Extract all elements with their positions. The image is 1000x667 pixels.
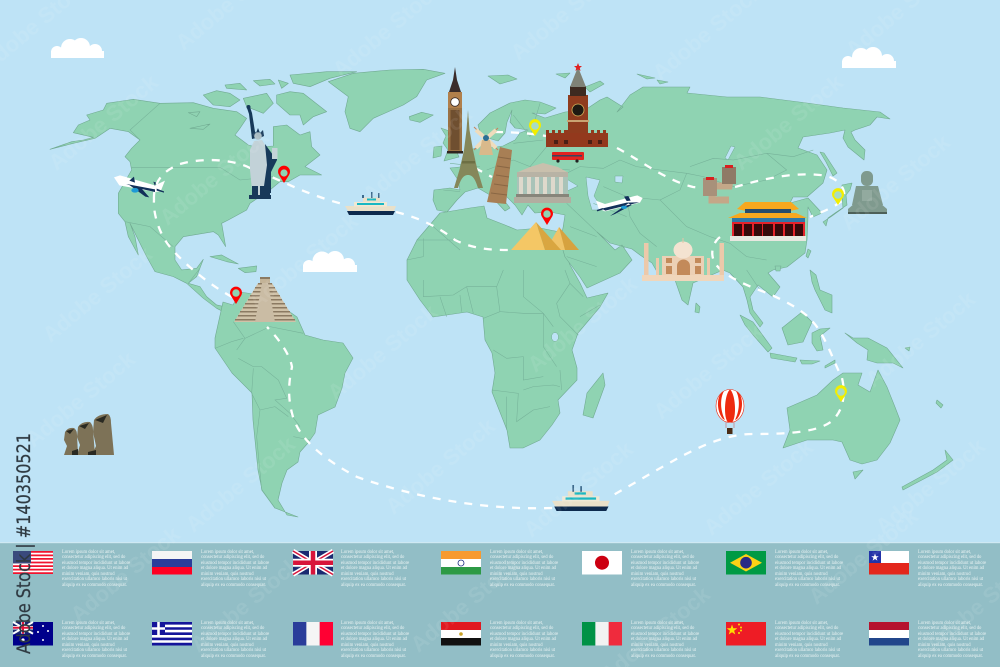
- text block: Chile: exercitation ullamco laboris nisi ut: [918, 577, 983, 582]
- stock watermarks: Adobe Stock: [38, 241, 157, 347]
- text block: Russia: Lorem ipsum dolor sit amet,: [201, 550, 254, 554]
- text block: Egypt: eiusmod tempor incididunt ut labore: [490, 632, 558, 637]
- text block: USA: et dolore magna aliqua. Ut enim ad: [62, 566, 128, 571]
- flag: Brazil: [726, 551, 766, 574]
- text block: Chile: minim veniam, quis nostrud: [918, 572, 971, 577]
- airplane over central asia: [596, 195, 643, 216]
- ship southern ocean: [552, 485, 610, 511]
- text block: Japan: [631, 550, 699, 588]
- landmark: parthenon: [514, 163, 571, 203]
- text block: China: minim veniam, quis nostrud: [775, 643, 828, 648]
- flag: Russia: [152, 551, 192, 574]
- flag: UK: [293, 551, 333, 574]
- landmark: eiffel tower: [454, 110, 483, 188]
- stock watermarks: Adobe Stock: [44, 69, 163, 175]
- text block: Netherlands: exercitation ullamco laboris nisi ut: [918, 648, 983, 653]
- landmark: taj mahal: [642, 238, 724, 281]
- text block: Italy: [631, 620, 699, 659]
- text block: Egypt: minim veniam, quis nostrud: [490, 643, 543, 648]
- text block: Brazil: exercitation ullamco laboris nisi ut: [775, 577, 840, 582]
- text block: Italy: exercitation ullamco laboris nisi ut: [631, 648, 696, 653]
- airplane over north america: [114, 175, 165, 197]
- text block: France: aliquip ex ea commodo consequat.: [341, 654, 406, 659]
- stock watermarks: Adobe Stock: [181, 431, 300, 537]
- text block: Netherlands: consectetur adipiscing elit, sed do: [918, 626, 981, 631]
- text block: USA: Lorem ipsum dolor sit amet,: [62, 550, 115, 554]
- text block: France: Lorem ipsum dolor sit amet,: [341, 620, 394, 626]
- text block: India: Lorem ipsum dolor sit amet,: [490, 550, 543, 554]
- text block: USA: [62, 550, 130, 588]
- stock watermarks: Adobe Stock: [186, 551, 305, 657]
- text block: Greece: Lorem ipsum dolor sit amet,: [201, 620, 254, 626]
- text block: China: eiusmod tempor incididunt ut labore: [775, 632, 843, 637]
- text block: UK: exercitation ullamco laboris nisi ut: [341, 577, 406, 582]
- text block: Greece: minim veniam, quis nostrud: [201, 643, 254, 648]
- text block: Chile: Lorem ipsum dolor sit amet,: [918, 550, 971, 554]
- pin: new york: [278, 166, 290, 183]
- text block: USA: aliquip ex ea commodo consequat.: [62, 583, 127, 588]
- stock watermarks: Adobe Stock: [649, 318, 768, 424]
- stock watermarks: Adobe Stock: [406, 551, 525, 657]
- flag: USA: [13, 551, 53, 574]
- stock watermarks: Adobe Stock: [244, 208, 363, 314]
- text block: USA: exercitation ullamco laboris nisi ut: [62, 577, 127, 582]
- landmark: mayan pyramid: [234, 277, 296, 322]
- africa: [407, 206, 608, 448]
- text block: Japan: Lorem ipsum dolor sit amet,: [631, 550, 684, 554]
- text block: UK: Lorem ipsum dolor sit amet,: [341, 550, 394, 554]
- text block: Russia: aliquip ex ea commodo consequat.: [201, 583, 266, 588]
- stock watermarks: Adobe Stock: [358, 101, 477, 207]
- text block: China: aliquip ex ea commodo consequat.: [775, 654, 840, 659]
- landmark: kremlin spasskaya tower: [546, 63, 608, 147]
- text block: Russia: [201, 550, 269, 588]
- text block: USA: eiusmod tempor incididunt ut labore: [62, 561, 130, 566]
- text block: Italy: Lorem ipsum dolor sit amet,: [631, 620, 684, 626]
- stock watermarks: Adobe Stock: [871, 433, 990, 539]
- text block: Australia: [62, 620, 130, 659]
- text block: France: exercitation ullamco laboris nisi ut: [341, 648, 406, 653]
- text block: China: exercitation ullamco laboris nisi ut: [775, 648, 840, 653]
- text block: Netherlands: [918, 620, 986, 659]
- landmark: great buddha: [848, 171, 887, 214]
- text block: Netherlands: minim veniam, quis nostrud: [918, 643, 971, 648]
- text block: Australia: exercitation ullamco laboris nisi ut: [62, 648, 127, 653]
- flag: China: [726, 622, 766, 646]
- text block: Japan: consectetur adipiscing elit, sed do: [631, 555, 694, 560]
- stock watermarks: Adobe Stock: [66, 521, 185, 627]
- text block: India: eiusmod tempor incididunt ut labore: [490, 561, 558, 566]
- text block: Russia: exercitation ullamco laboris nisi ut: [201, 577, 266, 582]
- ship atlantic: [345, 192, 396, 215]
- landmark: pyramids of giza: [511, 222, 579, 250]
- greenland and arctic islands: [188, 69, 445, 273]
- text block: Italy: minim veniam, quis nostrud: [631, 643, 684, 648]
- flag: France: [293, 622, 333, 646]
- flag: Italy: [582, 622, 622, 646]
- text block: Japan: exercitation ullamco laboris nisi ut: [631, 577, 696, 582]
- text block: Russia: eiusmod tempor incididunt ut labore: [201, 561, 269, 566]
- text block: Japan: minim veniam, quis nostrud: [631, 572, 684, 577]
- stock watermarks: Adobe Stock: [804, 503, 923, 609]
- text block: India: exercitation ullamco laboris nisi ut: [490, 577, 555, 582]
- text block: UK: minim veniam, quis nostrud: [341, 572, 394, 577]
- landmark: big ben: [447, 67, 463, 154]
- text block: Brazil: et dolore magna aliqua. Ut enim ad: [775, 566, 841, 571]
- bottom info band: [0, 542, 1000, 667]
- text block: Egypt: aliquip ex ea commodo consequat.: [490, 654, 555, 659]
- text block: Netherlands: et dolore magna aliqua. Ut enim ad: [918, 637, 984, 642]
- text block: Greece: exercitation ullamco laboris nisi ut: [201, 648, 266, 653]
- cloud atlantic: [303, 251, 357, 272]
- text block: Australia: eiusmod tempor incididunt ut labore: [62, 632, 130, 637]
- text block: India: consectetur adipiscing elit, sed do: [490, 555, 553, 560]
- text block: Russia: minim veniam, quis nostrud: [201, 572, 254, 577]
- text block: Italy: eiusmod tempor incididunt ut labore: [631, 632, 699, 637]
- text block: Netherlands: eiusmod tempor incididunt ut labore: [918, 632, 986, 637]
- text block: Egypt: [490, 620, 558, 659]
- flag: Greece: [152, 622, 192, 646]
- vertical stock id watermark: Adobe Stock | #140350521: [13, 433, 35, 654]
- text block: UK: [341, 550, 409, 588]
- text block: India: minim veniam, quis nostrud: [490, 572, 543, 577]
- south america: [215, 292, 353, 517]
- madagascar: [583, 373, 605, 418]
- stock watermarks: Adobe Stock: [381, 413, 500, 519]
- text block: Greece: aliquip ex ea commodo consequat.: [201, 654, 266, 659]
- british isles: [433, 128, 459, 161]
- text block: UK: et dolore magna aliqua. Ut enim ad: [341, 566, 407, 571]
- text block: China: et dolore magna aliqua. Ut enim ad: [775, 637, 841, 642]
- oceania islands: [853, 400, 953, 490]
- text block: Australia: minim veniam, quis nostrud: [62, 643, 115, 648]
- text block: UK: eiusmod tempor incididunt ut labore: [341, 561, 409, 566]
- text block: Russia: et dolore magna aliqua. Ut enim ad: [201, 566, 267, 571]
- cloud top right: [842, 47, 896, 68]
- stock watermarks: Adobe Stock: [519, 436, 638, 542]
- stock watermarks: Adobe Stock: [699, 434, 818, 540]
- pin: egypt: [541, 208, 553, 225]
- text block: China: consectetur adipiscing elit, sed do: [775, 626, 838, 631]
- text block: Chile: et dolore magna aliqua. Ut enim ad: [918, 566, 984, 571]
- flag: Japan: [582, 551, 622, 574]
- text block: Italy: consectetur adipiscing elit, sed do: [631, 626, 694, 631]
- flag: India: [441, 551, 481, 574]
- text block: USA: minim veniam, quis nostrud: [62, 572, 115, 577]
- pin: colombia: [230, 287, 242, 304]
- text block: France: eiusmod tempor incididunt ut labore: [341, 632, 409, 637]
- stock watermarks: Adobe Stock: [836, 129, 955, 235]
- landmark: moai statues: [64, 414, 114, 455]
- text block: Netherlands: aliquip ex ea commodo consequat.: [918, 654, 983, 659]
- text block: Greece: [201, 620, 269, 659]
- asian islands: [695, 152, 910, 368]
- text block: Russia: consectetur adipiscing elit, sed do: [201, 555, 264, 560]
- country borders: [125, 103, 813, 508]
- text block: France: et dolore magna aliqua. Ut enim ad: [341, 637, 407, 642]
- text block: Brazil: [775, 550, 843, 588]
- text block: France: consectetur adipiscing elit, sed do: [341, 626, 404, 631]
- text block: Egypt: et dolore magna aliqua. Ut enim ad: [490, 637, 556, 642]
- inland seas: [538, 146, 735, 342]
- landmark: great wall: [703, 165, 736, 200]
- north atlantic and arctic russian islands: [488, 73, 668, 92]
- text block: Italy: et dolore magna aliqua. Ut enim ad: [631, 637, 697, 642]
- australia: [783, 370, 900, 464]
- text block: France: [341, 620, 409, 659]
- text block: Chile: consectetur adipiscing elit, sed do: [918, 555, 981, 560]
- flag: Australia: [13, 622, 53, 646]
- text block: UK: consectetur adipiscing elit, sed do: [341, 555, 404, 560]
- stock watermarks: Adobe Stock: [21, 346, 140, 452]
- text block: UK: aliquip ex ea commodo consequat.: [341, 583, 406, 588]
- landmark: statue of liberty: [246, 105, 278, 199]
- flag: Netherlands: [869, 622, 909, 646]
- stock watermarks: Adobe Stock: [729, 69, 848, 175]
- cloud top left: [51, 38, 104, 58]
- pin: moscow: [529, 119, 541, 136]
- landmark: windmill: [474, 127, 498, 155]
- landmark: leaning tower of pisa: [487, 147, 512, 204]
- pin: japan: [832, 188, 844, 205]
- text block: China: [775, 620, 843, 659]
- text block: Egypt: Lorem ipsum dolor sit amet,: [490, 620, 543, 626]
- text block: Brazil: minim veniam, quis nostrud: [775, 572, 828, 577]
- text block: Greece: eiusmod tempor incididunt ut labore: [201, 632, 269, 637]
- text block: Brazil: aliquip ex ea commodo consequat.: [775, 583, 840, 588]
- text block: Brazil: Lorem ipsum dolor sit amet,: [775, 550, 828, 554]
- flag: Chile: [869, 551, 909, 574]
- stock watermarks: Adobe Stock: [861, 286, 980, 392]
- world map: [50, 69, 953, 517]
- text block: Chile: eiusmod tempor incididunt ut labore: [918, 561, 986, 566]
- text block: India: aliquip ex ea commodo consequat.: [490, 583, 555, 588]
- text block: USA: consectetur adipiscing elit, sed do: [62, 555, 125, 560]
- flag: Egypt: [441, 622, 481, 646]
- text block: Greece: consectetur adipiscing elit, sed do: [201, 626, 264, 631]
- landmark: forbidden city palace: [728, 202, 807, 241]
- text block: China: Lorem ipsum dolor sit amet,: [775, 620, 828, 626]
- text block: Australia: et dolore magna aliqua. Ut enim ad: [62, 637, 128, 642]
- text block: Chile: [918, 550, 986, 588]
- stock watermarks: Adobe Stock: [323, 299, 442, 405]
- north america: [50, 99, 322, 313]
- text block: Egypt: consectetur adipiscing elit, sed do: [490, 626, 553, 631]
- text block: India: [490, 550, 558, 588]
- text block: Netherlands: Lorem ipsum dolor sit amet,: [918, 620, 971, 626]
- text block: Japan: et dolore magna aliqua. Ut enim ad: [631, 566, 697, 571]
- pin: australia: [835, 385, 847, 402]
- text block: Japan: aliquip ex ea commodo consequat.: [631, 583, 696, 588]
- text block: Egypt: exercitation ullamco laboris nisi ut: [490, 648, 555, 653]
- text block: Australia: Lorem ipsum dolor sit amet,: [62, 620, 115, 626]
- text block: Italy: aliquip ex ea commodo consequat.: [631, 654, 696, 659]
- text block: France: minim veniam, quis nostrud: [341, 643, 394, 648]
- hot air balloon: [716, 390, 744, 434]
- text block: India: et dolore magna aliqua. Ut enim ad: [490, 566, 556, 571]
- text block: Japan: eiusmod tempor incididunt ut labore: [631, 561, 699, 566]
- text block: Australia: consectetur adipiscing elit, sed do: [62, 626, 125, 631]
- red bus: [552, 152, 584, 163]
- dashed travel routes: [154, 132, 844, 508]
- stock watermarks: Adobe Stock: [155, 124, 274, 230]
- text block: Brazil: eiusmod tempor incididunt ut labore: [775, 561, 843, 566]
- text block: Greece: et dolore magna aliqua. Ut enim ad: [201, 637, 267, 642]
- text block: Australia: aliquip ex ea commodo consequat.: [62, 654, 127, 659]
- eurasia: [433, 87, 890, 327]
- text block: Brazil: consectetur adipiscing elit, sed do: [775, 555, 838, 560]
- stock watermarks: Adobe Stock: [523, 271, 642, 377]
- text block: Chile: aliquip ex ea commodo consequat.: [918, 583, 983, 588]
